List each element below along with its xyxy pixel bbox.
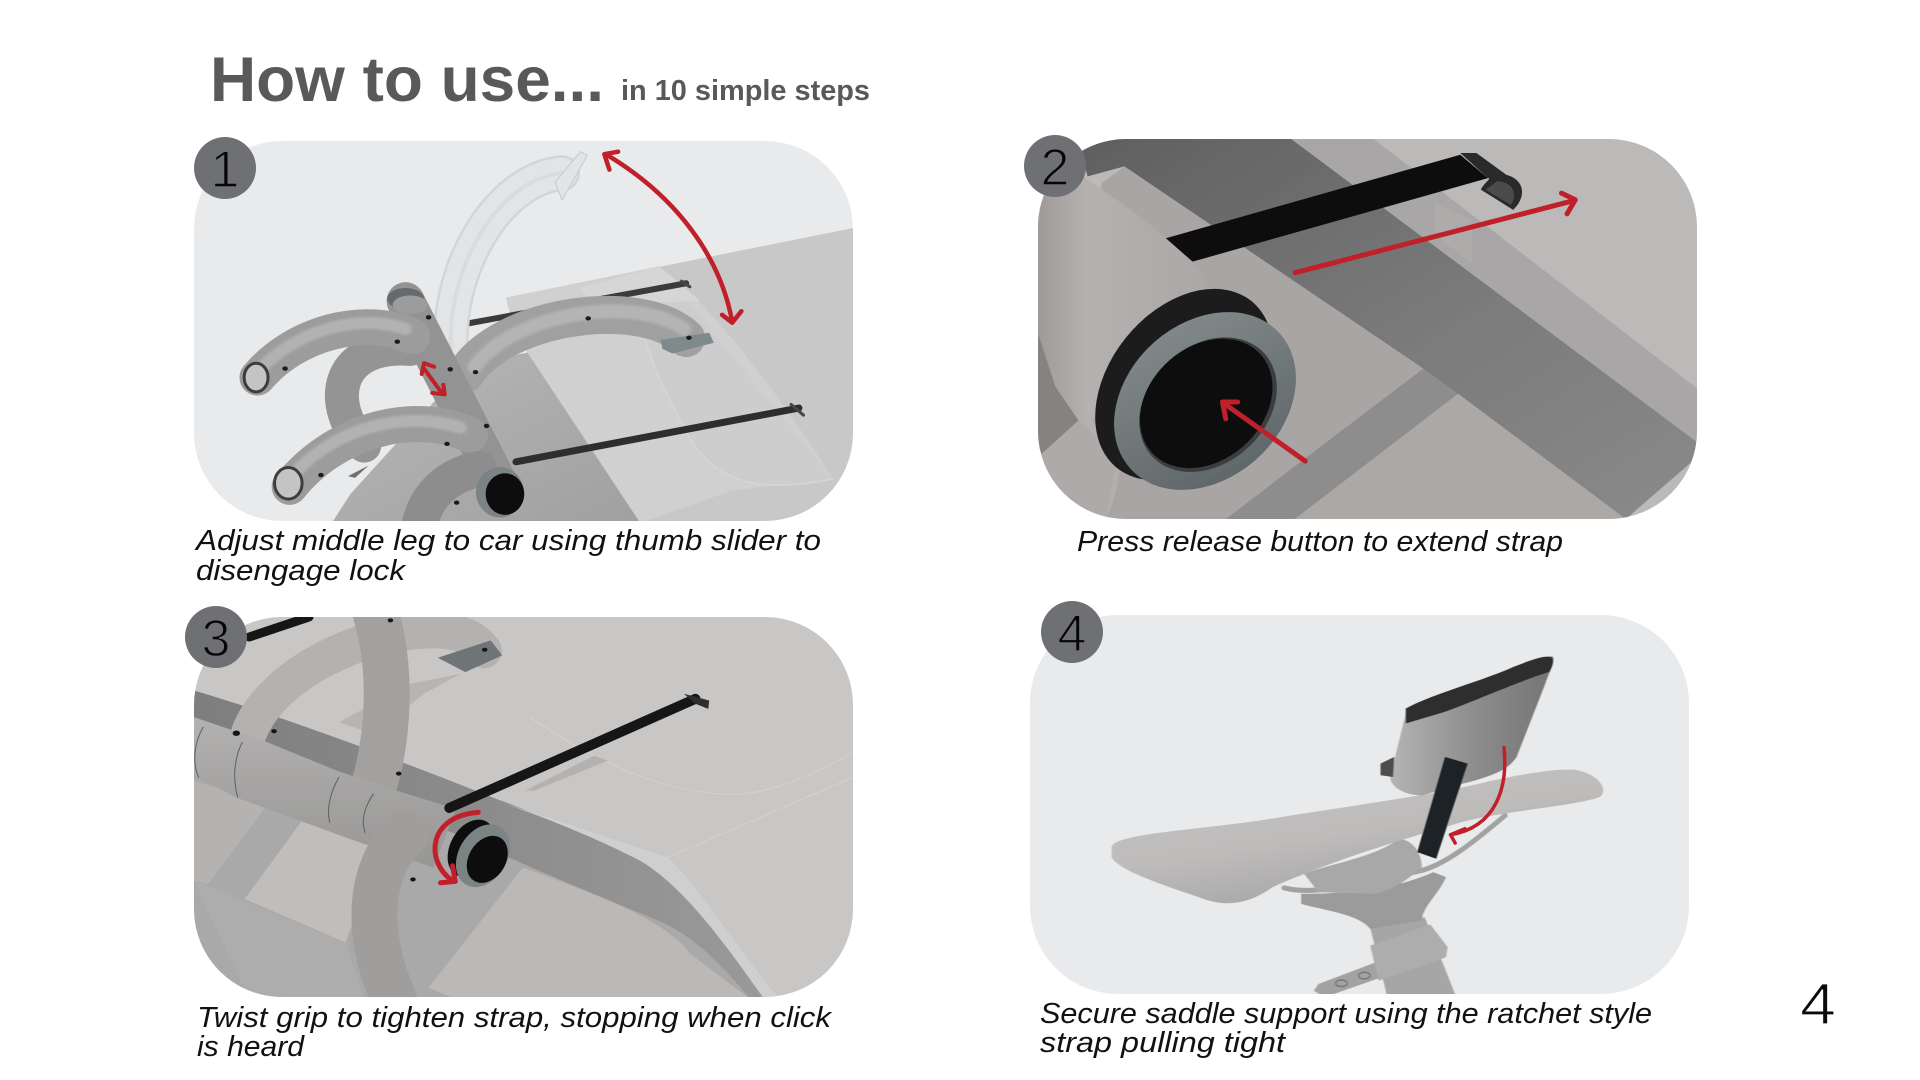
grip <box>1095 288 1268 480</box>
caption: step 4: Secure saddle support using the ratchet style <box>1040 998 1652 1030</box>
strap <box>449 699 695 808</box>
back loop <box>342 349 410 446</box>
strap <box>1417 757 1468 859</box>
spine <box>406 301 502 490</box>
image: step 4 saddle support <box>1030 615 1689 997</box>
panel: step 3 <box>185 606 853 1063</box>
dots <box>233 618 487 881</box>
title: in 10 simple steps <box>621 75 870 107</box>
arms <box>257 327 412 378</box>
caption: step 4: strap pulling tight <box>1040 1027 1287 1059</box>
badge: step 3: 3 <box>202 610 230 668</box>
badge: step 4: 4 <box>1058 605 1086 663</box>
grip <box>448 820 510 888</box>
front tube <box>374 834 406 999</box>
image: step 2 release button <box>1019 133 1697 519</box>
grip end <box>476 467 524 517</box>
panel: step 1 <box>194 137 853 587</box>
caption: step 3: Twist grip to tighten strap, stopping when click <box>197 1002 833 1034</box>
top lines <box>530 717 853 857</box>
icon: red slider arrow <box>422 363 445 394</box>
vertical tube <box>373 614 387 787</box>
title <box>210 45 870 115</box>
hooks <box>244 363 268 392</box>
image: step 3 twist grip <box>194 614 853 999</box>
straps <box>466 283 686 324</box>
image: step 1 roof rack on car <box>194 141 853 526</box>
icon: red press arrow <box>1222 402 1305 461</box>
black top strap <box>249 617 309 637</box>
panel: step 4 <box>1030 601 1689 1059</box>
badge: step 1: 1 <box>211 141 239 199</box>
icon: red extend arrow <box>1295 193 1575 273</box>
caption: step 1: Adjust middle leg to car using thumb slider to <box>194 525 821 557</box>
badge: step 2: 2 <box>1041 139 1069 197</box>
panel: step 2 <box>1019 133 1697 558</box>
page number: 4 <box>1800 972 1836 1037</box>
badge: step 2 <box>1024 135 1086 197</box>
badge: step 1 <box>194 137 256 199</box>
strap <box>1166 155 1488 262</box>
caption: step 3: is heard <box>197 1031 305 1063</box>
caption: step 1: disengage lock <box>196 555 407 587</box>
title: How to use... <box>210 45 604 115</box>
caption: step 3 <box>197 1002 833 1063</box>
right arm <box>465 315 686 374</box>
icon: red swing arrow <box>604 152 741 323</box>
body <box>194 717 456 867</box>
bag <box>1390 657 1553 795</box>
translucent leg <box>451 173 562 361</box>
wing band <box>194 690 774 999</box>
badge: step 3 <box>185 606 247 668</box>
icon: red twist arrow <box>435 812 478 883</box>
caption: step 2: Press release button to extend strap <box>1077 526 1563 558</box>
icon: red pull arrow <box>1451 748 1505 843</box>
saddle <box>1112 770 1603 903</box>
arm <box>249 630 484 732</box>
badge: step 4 <box>1041 601 1103 663</box>
caption: step 4 <box>1040 998 1652 1059</box>
caption: step 1 <box>194 525 821 587</box>
dots <box>282 315 692 505</box>
